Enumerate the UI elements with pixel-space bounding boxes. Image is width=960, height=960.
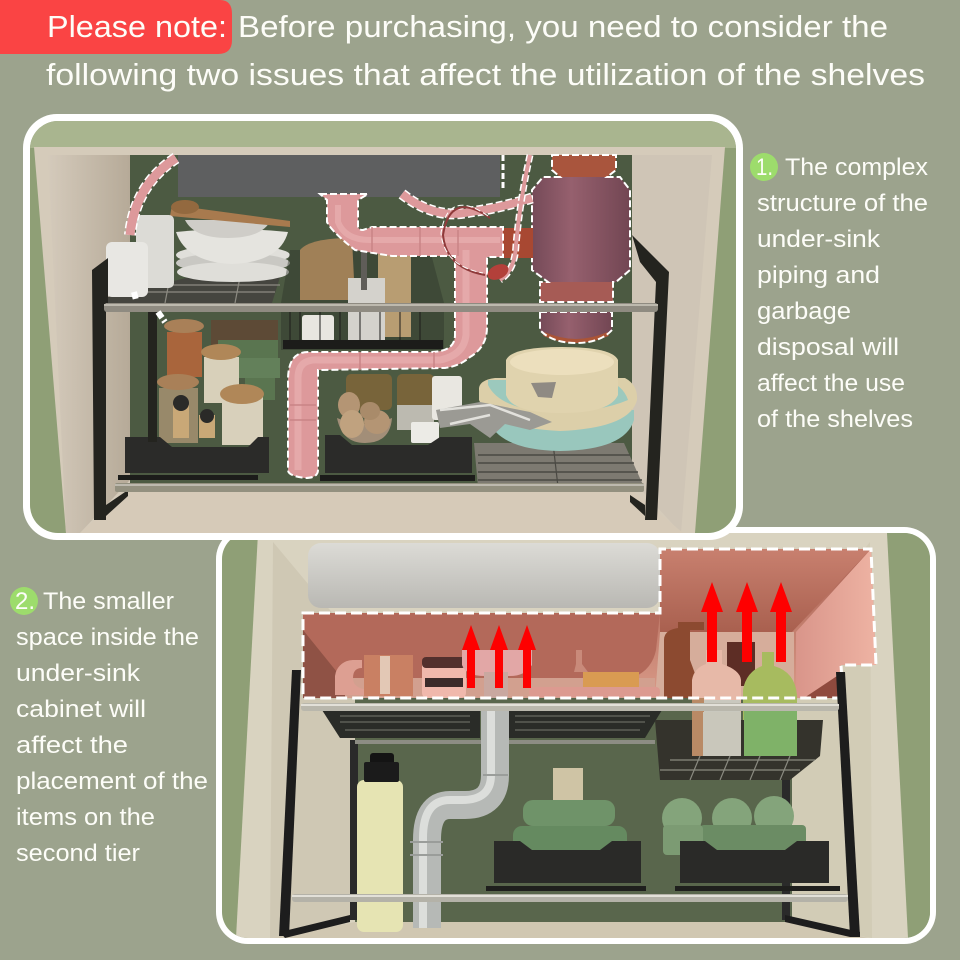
title: Please note:	[47, 9, 227, 44]
wire basket	[655, 712, 823, 780]
sink bowl	[178, 155, 500, 197]
text block: issue 2: placement of the	[16, 768, 208, 795]
panel: smaller space under the sink	[216, 527, 936, 944]
red arrows: small clearance	[462, 625, 536, 688]
text block: issue 2: items on the	[16, 804, 155, 831]
towels and drawers	[292, 768, 848, 902]
red arrows: tall clearance	[701, 582, 792, 662]
icon: number 2 badge	[10, 587, 38, 615]
text block: issue 2: The smaller	[43, 588, 174, 615]
text block: issue 1: 1.	[756, 154, 773, 181]
text block: issue 1	[750, 153, 928, 433]
cabinet frame	[236, 533, 910, 938]
cabinet frame	[34, 147, 725, 533]
detergent bottle	[357, 753, 403, 932]
back wall	[130, 155, 632, 495]
title: Before purchasing, you need to consider the	[238, 9, 888, 44]
bottom left drawer with jars	[118, 319, 280, 480]
callout: please note red pill	[0, 0, 232, 54]
floor	[130, 492, 632, 495]
connector to disposal	[503, 228, 533, 258]
shelf rails	[104, 303, 658, 492]
text block: issue 1: disposal will	[757, 334, 899, 361]
right green side	[887, 533, 930, 938]
text block: issue 1: structure of the	[757, 190, 928, 217]
left wall	[270, 542, 355, 938]
garbage disposal	[532, 155, 630, 343]
title: following two issues that affect the utilization of the shelves	[46, 57, 925, 92]
top shelf tableware	[106, 200, 290, 303]
grey drain pipe	[410, 711, 508, 928]
shelf frame lower	[279, 670, 860, 938]
pink hoses: thin	[130, 155, 532, 322]
text block: issue 1: piping and	[757, 262, 880, 289]
pink pipes: drain	[288, 194, 503, 478]
right wall	[792, 542, 872, 938]
top green band	[30, 121, 736, 148]
pots and pans	[436, 347, 637, 451]
text block: issue 2: 2.	[15, 588, 35, 615]
items on second tier	[335, 622, 797, 755]
text block: issue 1: under-sink	[757, 226, 881, 253]
icon: number 1 badge	[750, 153, 778, 181]
dashed outline of clearance zone	[303, 549, 876, 698]
text block: issue 2: second tier	[16, 840, 140, 867]
text block: issue 1: The complex	[785, 154, 928, 181]
text block: issue 1: affect the use	[757, 370, 905, 397]
mid basket with kraft bags	[281, 238, 444, 350]
text block: issue 2: under-sink	[16, 660, 141, 687]
text block: issue 2	[10, 587, 208, 867]
text block: issue 2: space inside the	[16, 624, 199, 651]
bottom right wire shelf	[474, 443, 644, 487]
sink basin	[308, 543, 660, 608]
back wall	[355, 698, 792, 922]
left wall	[66, 155, 130, 533]
text block: issue 1: garbage	[757, 298, 851, 325]
title	[46, 9, 925, 92]
text block: issue 2: cabinet will	[16, 696, 146, 723]
highlighted clearance zone	[303, 549, 876, 698]
text block: issue 1: of the shelves	[757, 406, 913, 433]
floor	[270, 922, 868, 938]
panel: under-sink piping and garbage disposal	[23, 114, 743, 540]
shelf frame upper	[92, 235, 669, 520]
right wall	[632, 155, 712, 533]
bottom middle drawer with eggs and honey	[320, 374, 475, 481]
text block: issue 2: affect the	[16, 732, 128, 759]
